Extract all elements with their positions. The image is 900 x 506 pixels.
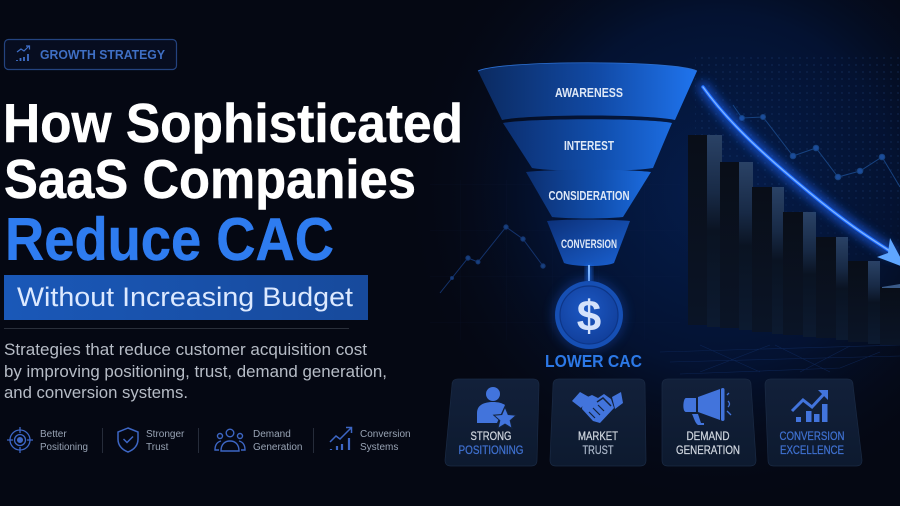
card: strong positioning: STRONG (470, 429, 512, 443)
icon: megaphone (683, 388, 731, 425)
bar 5 (816, 237, 848, 340)
coin: dollar: $ (577, 292, 601, 341)
benefit: conversion systems (330, 428, 411, 453)
funnel (478, 63, 697, 266)
card: demand generation (662, 379, 756, 466)
funnel stage: conversion: CONVERSION (561, 237, 617, 251)
card: demand generation: DEMAND (686, 429, 730, 443)
subtitle text: and conversion systems. (4, 383, 188, 402)
funnel stage: interest (503, 119, 672, 171)
banner: without increasing budget (4, 275, 368, 320)
card: conversion excellence: EXCELLENCE (780, 443, 844, 457)
bar 3 (752, 187, 784, 334)
card: market trust (550, 379, 646, 466)
card: market trust: MARKET (578, 429, 619, 443)
badge label: GROWTH STRATEGY (40, 48, 166, 62)
icon: person with star (477, 387, 516, 428)
subtitle text: by improving positioning, trust, demand generation, (4, 362, 387, 381)
funnel stage: conversion (547, 220, 630, 266)
benefit: demand generation: Generation (253, 442, 302, 453)
descending bar chart (688, 135, 900, 345)
icon: growth chart (17, 46, 30, 61)
icon: rising chart (792, 390, 828, 422)
divider (4, 328, 349, 329)
benefit: demand generation (215, 429, 302, 453)
subtitle text (4, 340, 387, 402)
bar 7 (880, 284, 900, 345)
badge: growth strategy (4, 40, 176, 70)
bar 2 (720, 162, 753, 330)
subtitle text: Strategies that reduce customer acquisition cost (4, 340, 367, 359)
funnel stage: interest: INTEREST (564, 139, 614, 153)
benefit: better positioning (7, 427, 88, 453)
benefit: conversion systems: Systems (360, 442, 398, 453)
glowing downward arrow (703, 87, 900, 268)
card: conversion excellence: CONVERSION (780, 429, 844, 443)
title: SaaS Companies (4, 148, 416, 210)
funnel stage: awareness (478, 63, 697, 120)
perspective floor grid (660, 345, 900, 374)
coin: dollar (552, 278, 626, 352)
title: How Sophisticated (3, 92, 463, 154)
benefit: better positioning: Positioning (40, 442, 88, 453)
title: Reduce CAC (5, 206, 334, 273)
left line chart backdrop (440, 225, 545, 293)
benefit: conversion systems: Conversion (360, 429, 411, 440)
banner: without increasing budget: Without Increasing Budget (17, 282, 354, 312)
benefit: demand generation: Demand (253, 429, 291, 440)
right line chart backdrop (733, 105, 900, 187)
funnel stage: awareness: AWARENESS (555, 86, 623, 100)
label: lower cac: LOWER CAC (545, 351, 642, 371)
funnel stage: consideration: CONSIDERATION (548, 189, 630, 203)
title (3, 92, 463, 273)
benefit: better positioning: Better (40, 429, 67, 440)
connector from funnel to coin (586, 265, 592, 283)
bar 4 (783, 212, 816, 337)
benefit: stronger trust: Trust (146, 442, 169, 453)
card: demand generation: GENERATION (676, 443, 740, 457)
benefit row (7, 427, 411, 453)
funnel stage: consideration (526, 170, 651, 218)
benefit: stronger trust: Stronger (146, 429, 185, 440)
benefit: stronger trust (118, 428, 185, 453)
bar 1 (688, 135, 722, 327)
icon: handshake (572, 392, 623, 423)
bar 6 (848, 261, 880, 344)
card: market trust: TRUST (582, 443, 614, 457)
card: strong positioning (445, 379, 539, 466)
card: strong positioning: POSITIONING (458, 443, 524, 457)
dotted world map backdrop (695, 52, 900, 255)
card: conversion excellence (765, 379, 862, 466)
